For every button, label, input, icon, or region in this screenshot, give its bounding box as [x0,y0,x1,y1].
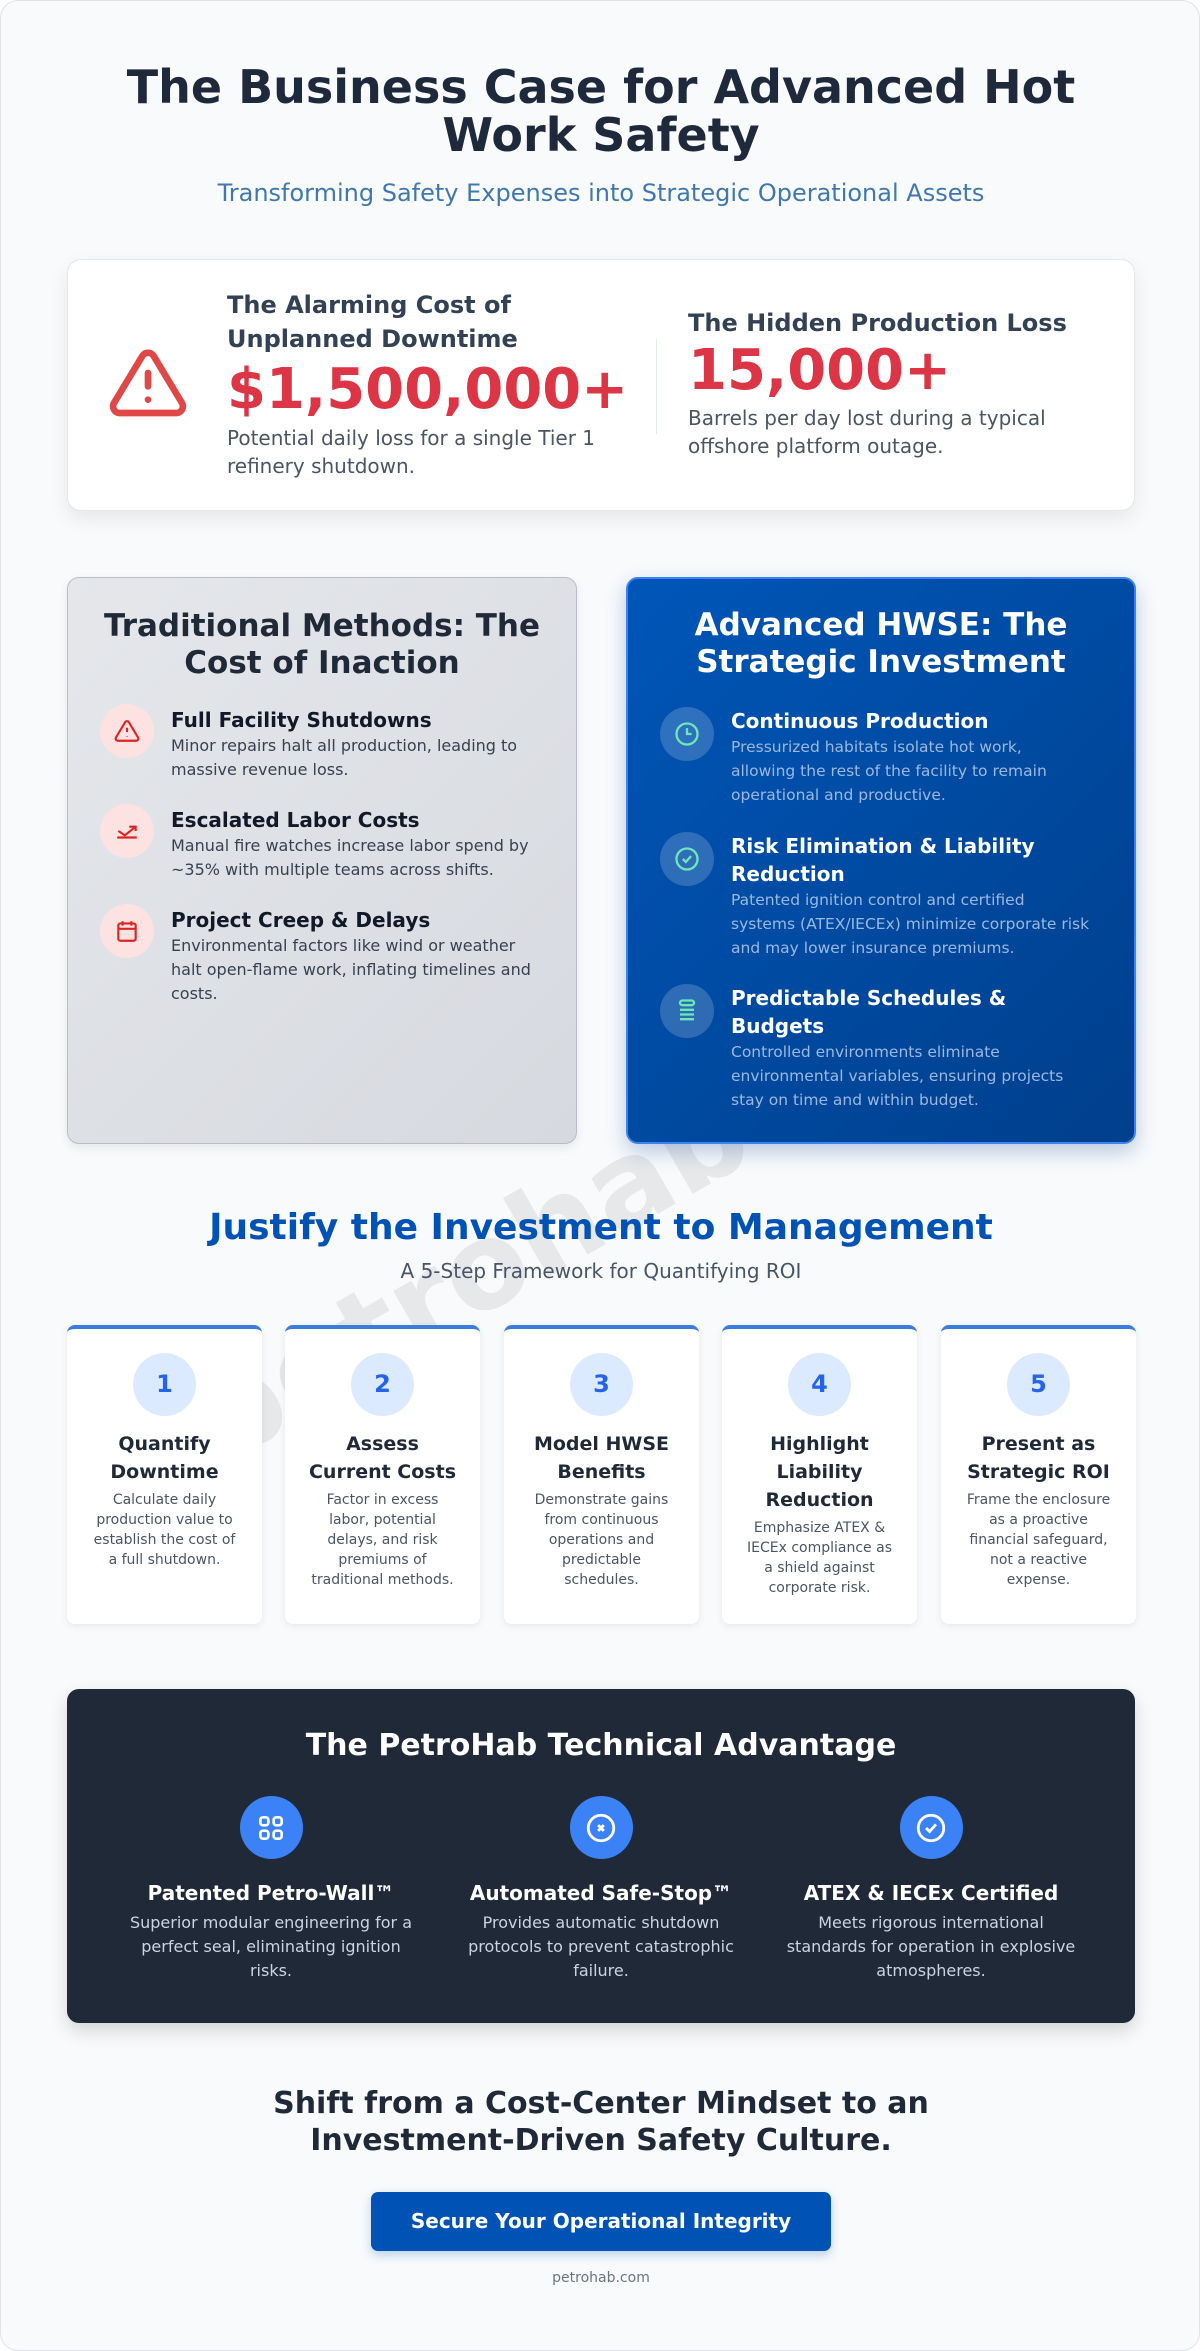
step 1 [67,1325,262,1624]
feature: safe-stop: Provides automatic shutdown protocols to prevent catastrophic failure. [468,1913,734,1980]
feature: certified: Meets rigorous international standards for operation in explosive atmospheres. [787,1913,1075,1980]
panel: advanced HWSE: Predictable Schedules & [731,986,1006,1010]
icon: warning [110,350,186,416]
panel: traditional methods: Escalated Labor Costs [171,808,420,832]
feature: safe-stop: Automated Safe-Stop™ [470,1881,732,1905]
panel: advanced HWSE: Patented ignition control and certified [731,891,1025,909]
panel: advanced HWSE [626,577,1136,1144]
item: continuous production [660,707,1047,804]
panel: traditional methods: Manual fire watches increase labor spend by ~35% with multiple teams across shifts. [171,836,529,879]
panel: advanced HWSE: operational and productive. [731,786,946,804]
closing statement [273,2086,929,2158]
step 2: Assess Current Costs [309,1433,456,1483]
feature: safe-stop [468,1796,734,1980]
panel: traditional methods: Environmental factors like wind or weather halt open-flame work, inflating timelines and costs. [171,936,531,1003]
stat: downtime cost: The Alarming Cost of Unplanned Downtime [227,291,518,353]
step 4: Emphasize ATEX & IECEx compliance as a shield against corporate risk. [747,1520,892,1596]
step 5 [941,1325,1136,1624]
footer: petrohab.com [552,2270,650,2286]
CTA button [371,2192,831,2251]
heading [694,607,1067,680]
item: shutdowns [100,704,517,779]
item: risk elimination [660,832,1089,957]
step 5: Present as Strategic ROI [967,1433,1110,1483]
panel: advanced HWSE: allowing the rest of the facility to remain [731,762,1047,780]
heading [104,608,540,681]
stat: production loss [688,309,1067,458]
step 4 [722,1325,917,1624]
step 3: Demonstrate gains from continuous operations and predictable schedules. [535,1492,668,1588]
panel: traditional methods [67,577,577,1144]
panel: advanced HWSE: Reduction [731,862,845,886]
panel: traditional methods: Project Creep & Delays [171,908,430,932]
heading: Advanced HWSE: The [695,607,1067,643]
heading: Strategic Investment [696,644,1066,680]
panel: traditional methods: Full Facility Shutdowns [171,708,432,732]
feature: petro-wall: Patented Petro-Wall™ [148,1881,394,1905]
step 3: 3 [593,1370,610,1398]
step 1: 1 [156,1370,173,1398]
subtitle: Transforming Safety Expenses into Strategic Operational Assets [218,179,984,207]
step 5: 5 [1030,1370,1047,1398]
stat card [67,259,1135,511]
section subtitle: A 5-Step Framework for Quantifying ROI [401,1259,801,1283]
section heading: justify: Justify the Investment to Management [209,1207,993,1248]
step 4: 4 [811,1370,828,1398]
stat: production loss: 15,000+ [688,338,951,403]
step 1: Quantify Downtime [110,1433,219,1483]
panel: advanced HWSE: environmental variables, ensuring projects [731,1067,1063,1085]
step 4: Highlight Liability Reduction [765,1433,874,1511]
panel: advanced HWSE: Budgets [731,1014,824,1038]
stat: production loss: Barrels per day lost during a typical offshore platform outage. [688,406,1046,458]
feature: petro-wall [130,1796,412,1980]
closing statement: Investment-Driven Safety Culture. [310,2123,892,2158]
heading: Cost of Inaction [184,645,460,681]
title: The Business Case for Advanced Hot [127,60,1075,114]
item: labor [100,804,529,879]
panel: advanced HWSE: Controlled environments eliminate [731,1043,1000,1061]
panel: advanced HWSE: and may lower insurance premiums. [731,939,1015,957]
panel: technical advantage [67,1689,1135,2023]
panel: advanced HWSE: Risk Elimination & Liability [731,834,1035,858]
CTA button: Secure Your Operational Integrity [411,2209,791,2233]
watermark: petrohab [168,1061,773,1490]
stat: downtime cost: $1,500,000+ [227,357,628,422]
stat: production loss: The Hidden Production Loss [688,309,1067,337]
step 1: Calculate daily production value to establish the cost of a full shutdown. [94,1492,235,1568]
step 2 [285,1325,480,1624]
title: Work Safety [442,108,760,162]
panel: advanced HWSE: stay on time and within budget. [731,1091,979,1109]
item: delays [100,904,531,1003]
title [126,60,1075,162]
step 2: Factor in excess labor, potential delays, and risk premiums of traditional methods. [311,1492,454,1588]
step 3 [504,1325,699,1624]
stat: downtime cost: Potential daily loss for a single Tier 1 refinery shutdown. [227,426,595,478]
panel: advanced HWSE: Continuous Production [731,709,988,733]
step 5: Frame the enclosure as a proactive financial safeguard, not a reactive expense. [967,1492,1110,1588]
heading: The PetroHab Technical Advantage [306,1728,896,1763]
panel: advanced HWSE: systems (ATEX/IECEx) minimize corporate risk [731,915,1089,933]
panel: advanced HWSE: Pressurized habitats isolate hot work, [731,738,1022,756]
item: predictable schedules [660,984,1063,1109]
feature: certified [787,1796,1075,1980]
feature: petro-wall: Superior modular engineering for a perfect seal, eliminating ignition risks. [130,1913,412,1980]
stat: downtime cost [227,291,628,478]
step 3: Model HWSE Benefits [534,1433,669,1483]
feature: certified: ATEX & IECEx Certified [804,1881,1058,1905]
heading: Traditional Methods: The [104,608,540,644]
panel: traditional methods: Minor repairs halt all production, leading to massive revenue loss. [171,736,517,779]
closing statement: Shift from a Cost-Center Mindset to an [273,2086,929,2121]
step 2: 2 [374,1370,391,1398]
